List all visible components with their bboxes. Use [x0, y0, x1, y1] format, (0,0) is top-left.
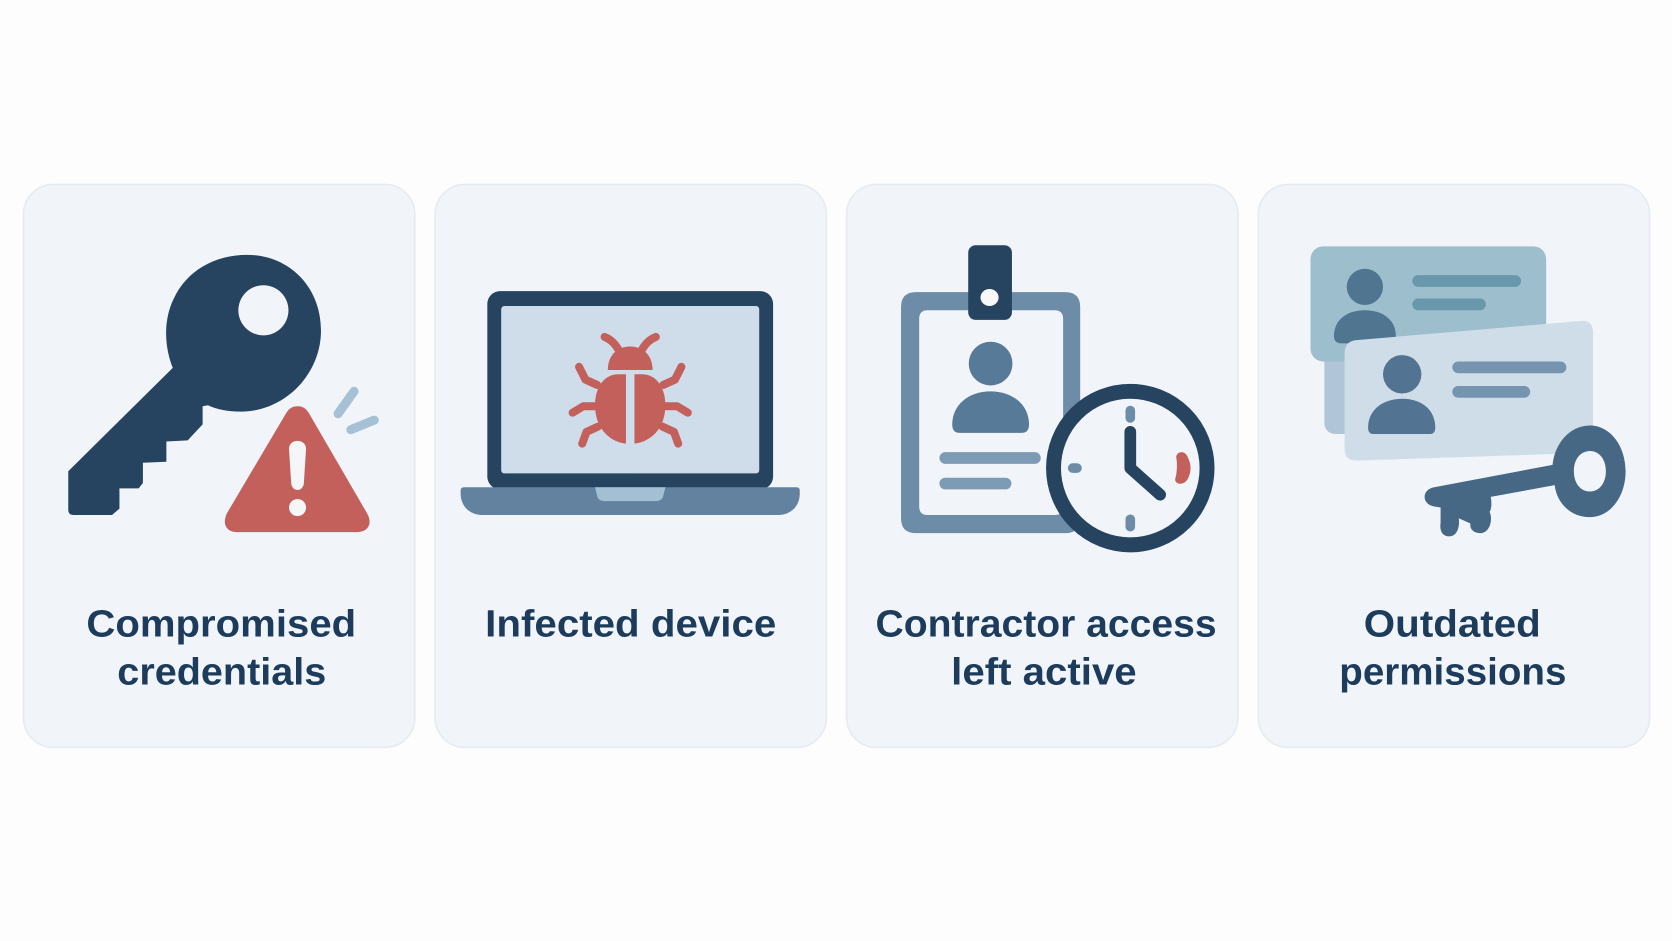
label: contractor access left active: Contractor access: [875, 603, 1217, 646]
icon: lower back card: [1324, 320, 1410, 434]
panel: outdated permissions: [1258, 184, 1650, 747]
icon: old key: [1425, 425, 1626, 536]
icon: front card lines: [1458, 367, 1561, 392]
icon: laptop screen: [501, 306, 759, 473]
icon: front card person: [1368, 355, 1435, 434]
label: compromised credentials: Compromised: [86, 603, 356, 646]
icon: badge text lines: [945, 458, 1035, 484]
icon: key: [68, 255, 321, 515]
icon: exclamation mark: [289, 441, 306, 516]
icon: badge frame: [901, 292, 1080, 533]
panel: contractor access left active: [847, 184, 1238, 747]
icon: back card lines: [1418, 281, 1515, 304]
label: infected device: Infected device: [485, 603, 776, 646]
icon: clock: [1054, 391, 1207, 545]
label: outdated permissions: permissions: [1339, 651, 1566, 694]
icon: bug: [573, 337, 688, 444]
icon: front card: [1345, 321, 1593, 461]
panel: compromised credentials: [23, 184, 415, 747]
icon: teal back card: [1310, 246, 1546, 361]
icon: laptop lid: [487, 291, 773, 489]
icon: laptop notch: [595, 487, 665, 501]
label: contractor access left active: left active: [951, 651, 1137, 694]
icon: warning triangle: [225, 406, 370, 532]
icon: back card person: [1334, 269, 1396, 343]
icon: laptop base: [461, 487, 800, 515]
icon: badge clip: [968, 245, 1012, 320]
icon: key hole: [238, 285, 288, 335]
label: compromised credentials: credentials: [117, 651, 326, 694]
icon: alert dashes: [338, 391, 374, 430]
label: outdated permissions: Outdated: [1364, 603, 1541, 646]
panel: infected device: [435, 184, 826, 747]
icon: badge person: [952, 342, 1029, 433]
